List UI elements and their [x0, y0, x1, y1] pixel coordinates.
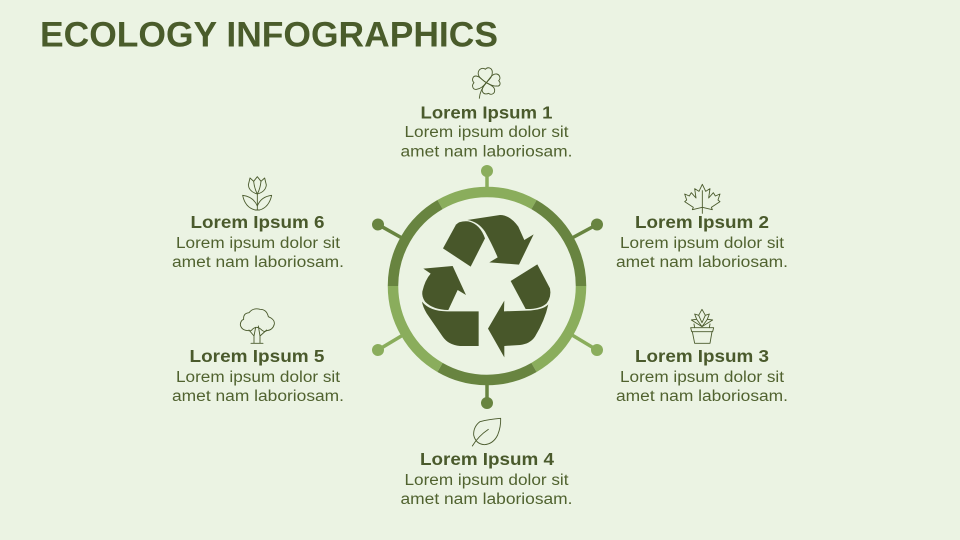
- heading 1: Lorem Ipsum 1: [420, 102, 553, 122]
- item 1: [400, 68, 572, 160]
- heading 5: Lorem Ipsum 5: [190, 346, 325, 366]
- body 4: Lorem ipsum dolor sit: [404, 472, 569, 489]
- ring segments: [393, 192, 581, 380]
- body 2: [616, 235, 788, 271]
- item 5: [172, 309, 344, 405]
- heading 6: Lorem Ipsum 6: [190, 212, 325, 232]
- icon: tree: [240, 309, 274, 343]
- icon: clover: [473, 68, 500, 98]
- body 4: amet nam laboriosam.: [400, 491, 572, 508]
- body 3: Lorem ipsum dolor sit: [620, 369, 785, 386]
- icon: leaf: [472, 418, 501, 446]
- body 1: [400, 124, 572, 160]
- icon: tulip: [243, 177, 272, 210]
- body 5: Lorem ipsum dolor sit: [176, 369, 341, 386]
- icon: recycling arrows: [422, 215, 550, 357]
- body 6: amet nam laboriosam.: [172, 254, 344, 271]
- heading 2: Lorem Ipsum 2: [635, 212, 769, 232]
- icon: maple leaf: [685, 184, 720, 213]
- body 1: amet nam laboriosam.: [400, 144, 572, 160]
- body 3: amet nam laboriosam.: [616, 388, 788, 405]
- heading 3: Lorem Ipsum 3: [635, 346, 769, 366]
- body 4: [400, 472, 572, 508]
- item 4: [400, 418, 572, 508]
- item 6: [172, 177, 344, 271]
- body 6: Lorem ipsum dolor sit: [176, 235, 341, 252]
- body 3: [616, 369, 788, 405]
- body 6: [172, 235, 344, 271]
- title: ECOLOGY INFOGRAPHICS: [40, 16, 498, 54]
- body 5: amet nam laboriosam.: [172, 388, 344, 405]
- item 2: [616, 184, 788, 271]
- item 3: [616, 309, 788, 405]
- spokes and dots: [372, 165, 603, 409]
- body 2: amet nam laboriosam.: [616, 254, 788, 271]
- body 1: Lorem ipsum dolor sit: [404, 124, 569, 141]
- icon: potted plant: [691, 309, 714, 343]
- body 5: [172, 369, 344, 405]
- body 2: Lorem ipsum dolor sit: [620, 235, 785, 252]
- ring diagram: [372, 165, 603, 409]
- heading 4: Lorem Ipsum 4: [420, 449, 554, 469]
